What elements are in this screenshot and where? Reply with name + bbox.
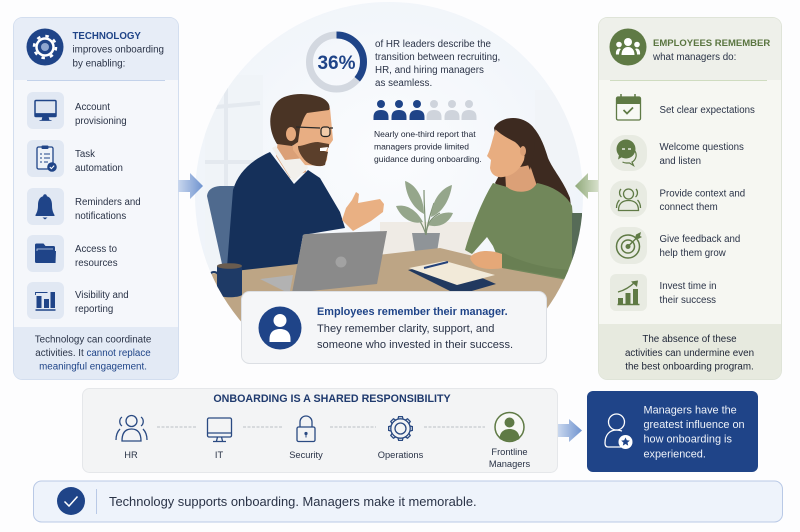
limited guidance text: guidance during onboarding.: [374, 154, 482, 164]
office background: [205, 88, 475, 256]
item: reminders and notifications: [27, 188, 141, 225]
arrow: employees to scene: [575, 173, 598, 199]
technology footer note: meaningful engagement.: [39, 362, 147, 372]
item: task automation: automation: [75, 163, 123, 174]
item: invest time: [610, 274, 717, 311]
takeaway banner: Technology supports onboarding. Managers make it memorable.: [109, 494, 477, 509]
item: provide context: connect them: [660, 202, 718, 213]
plant: [396, 181, 453, 252]
item: access to resources: Access to: [75, 244, 117, 255]
item: task automation: [27, 140, 123, 177]
mug: [208, 263, 242, 297]
item: welcome questions: Welcome questions: [660, 142, 744, 153]
technology subheading: improves onboarding: [72, 44, 164, 56]
role: HR: [116, 416, 147, 460]
item: account provisioning: [27, 92, 127, 129]
arrow: roles to managers: [558, 419, 582, 442]
employees subheading: what managers do:: [652, 52, 736, 63]
takeaway banner: [34, 481, 782, 522]
role: security: [289, 416, 323, 460]
item: give feedback: help them grow: [660, 248, 727, 259]
technology subheading: by enabling:: [72, 58, 125, 69]
role: operations: Operations: [378, 450, 424, 460]
callout: managers have greatest influence: [587, 391, 758, 472]
role: operations: [378, 417, 424, 460]
stat donut: 36%: [310, 35, 364, 89]
technology heading: TECHNOLOGY: [72, 31, 141, 42]
callout: managers have greatest influence: how onboarding is: [644, 434, 732, 446]
item: give feedback: [610, 227, 740, 264]
role: frontline managers: Managers: [489, 459, 531, 469]
item: account provisioning: Account: [75, 102, 110, 113]
item: visibility and reporting: reporting: [75, 304, 113, 315]
callout: employees remember their manager: Employees remember their manager.: [317, 306, 508, 318]
callout: employees remember their manager: [242, 292, 546, 364]
stat donut: 36%: 36%: [317, 53, 356, 74]
item: access to resources: resources: [75, 258, 118, 269]
callout: managers have greatest influence: experienced.: [644, 448, 706, 460]
item: access to resources: [27, 235, 118, 272]
role: frontline managers: Frontline: [491, 447, 528, 457]
item: account provisioning: provisioning: [75, 116, 127, 127]
icon: employees group: [610, 28, 646, 66]
employees footer note: The absence of these: [642, 334, 737, 345]
icon: technology gear: [26, 28, 64, 66]
arrow: technology to scene: [178, 173, 203, 199]
callout: employees remember their manager: someone who invested in their success.: [317, 339, 513, 351]
role: IT: IT: [215, 450, 223, 460]
stat text: as seamless.: [375, 78, 432, 89]
employees footer note: activities can undermine even: [625, 348, 754, 359]
item: invest time: Invest time in: [660, 281, 717, 292]
panel: shared responsibility: ONBOARDING IS A SHARED RESPONSIBILITY: [213, 393, 451, 405]
item: set clear expectations: Set clear expectations: [660, 105, 755, 116]
stat text: HR, and hiring managers: [375, 65, 484, 76]
woman: [465, 118, 582, 282]
icon: manager: [258, 306, 302, 350]
item: invest time: their success: [660, 295, 716, 306]
item: give feedback: Give feedback and: [660, 234, 740, 245]
role: frontline managers: [489, 412, 531, 469]
panel: technology: [14, 18, 178, 380]
callout: managers have greatest influence: greatest influence on: [644, 419, 745, 431]
item: visibility and reporting: [27, 282, 129, 319]
limited guidance text: managers provide limited: [374, 142, 469, 152]
item: set clear expectations: [616, 94, 755, 120]
item: provide context: Provide context and: [660, 188, 745, 200]
limited guidance text: Nearly one-third report that: [374, 129, 476, 139]
central scene: manager and employee conversation: [195, 2, 583, 322]
item: visibility and reporting: Visibility and: [75, 290, 129, 301]
employees footer note: the best onboarding program.: [625, 362, 754, 372]
laptop: [260, 231, 387, 293]
technology footer note: activities. It cannot replace: [35, 348, 151, 359]
chair: [207, 186, 234, 268]
item: task automation: Task: [75, 149, 95, 160]
panel: shared responsibility: [82, 388, 558, 472]
technology footer note: Technology can coordinate: [35, 334, 151, 346]
icon: check: [57, 487, 85, 515]
stat text: of HR leaders describe the: [375, 39, 491, 50]
role: IT: [208, 418, 232, 460]
employees heading: EMPLOYEES REMEMBER: [653, 38, 770, 49]
item: provide context: [610, 180, 745, 217]
man: [226, 94, 384, 280]
table: [211, 248, 565, 322]
callout: employees remember their manager: They remember clarity, support, and: [317, 323, 494, 335]
item: reminders and notifications: notifications: [75, 211, 126, 222]
item: reminders and notifications: Reminders and: [75, 197, 141, 208]
panel: employees remember: [598, 18, 782, 380]
role: HR: HR: [124, 450, 138, 460]
notebook and pen: [408, 261, 496, 291]
icon: manager with star badge: [605, 414, 632, 449]
role: security: Security: [289, 450, 323, 460]
stat text: transition between recruiting,: [375, 52, 500, 63]
people pictogram: three of six highlighted: [374, 100, 476, 120]
item: welcome questions: [610, 135, 744, 171]
callout: managers have greatest influence: Managers have the: [644, 404, 737, 416]
item: welcome questions: and listen: [660, 156, 701, 167]
